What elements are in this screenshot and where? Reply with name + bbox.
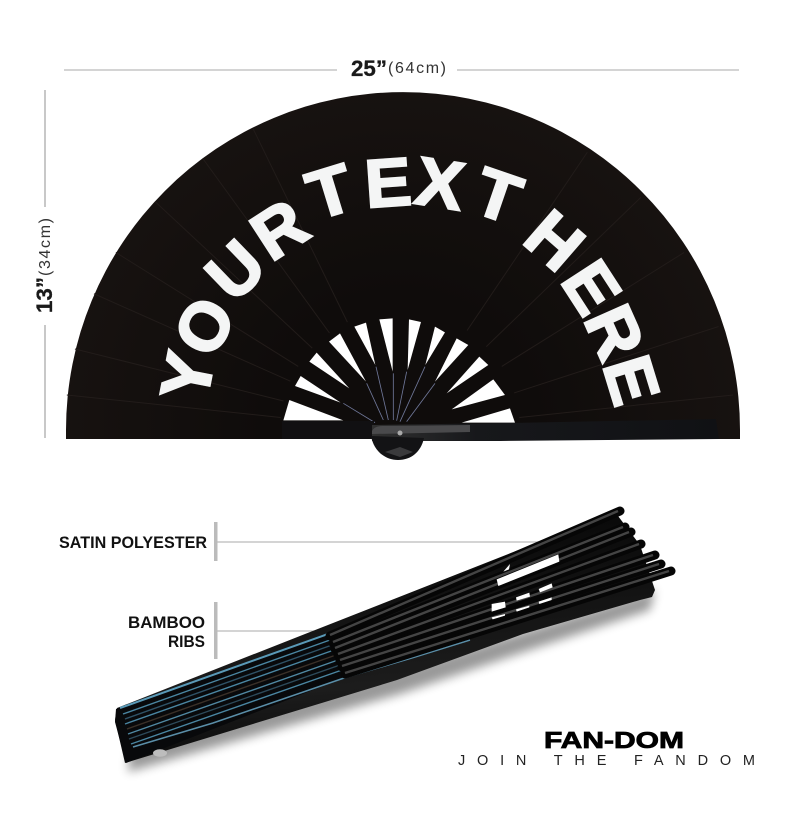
label: bamboo ribs: BAMBOO — [128, 613, 205, 632]
logo: FAN-DOM — [544, 727, 684, 753]
fabric folds — [67, 129, 733, 417]
label: satin polyester — [59, 522, 540, 561]
pin — [153, 749, 167, 757]
width dimension: (64cm) — [388, 60, 446, 77]
label: bamboo ribs — [128, 602, 330, 659]
curved fan text: O — [159, 285, 251, 368]
width dimension — [64, 56, 739, 81]
open fan — [66, 92, 740, 460]
curved fan text: H — [511, 195, 598, 286]
rod highlights — [330, 511, 669, 673]
rib openings — [283, 318, 515, 423]
height dimension: 13” — [32, 277, 57, 313]
curved fan text: Y — [146, 345, 229, 407]
curved fan text: U — [191, 226, 280, 315]
height dimension — [32, 90, 57, 438]
label: bamboo ribs: RIBS — [168, 632, 205, 651]
fan canopy — [66, 92, 740, 439]
curved fan text — [146, 142, 675, 413]
curved fan text: T — [298, 149, 362, 234]
curved fan text: E — [588, 347, 675, 413]
width dimension: 25” — [351, 56, 387, 81]
left guard stick — [282, 421, 374, 439]
curved fan text: E — [362, 143, 414, 222]
bamboo handle ribs — [115, 633, 470, 763]
label: satin polyester: SATIN POLYESTER — [59, 533, 207, 552]
folded fan — [115, 511, 671, 772]
white fabric gaps — [492, 554, 559, 619]
curved fan text: T — [465, 152, 531, 239]
logo — [458, 727, 755, 769]
curved fan text: R — [569, 294, 659, 371]
shadow — [128, 590, 655, 772]
black rods — [330, 511, 671, 674]
height dimension: (34cm) — [37, 218, 54, 276]
lower body — [115, 512, 655, 763]
curved fan text: X — [410, 142, 469, 225]
right guard stick — [372, 419, 719, 441]
hub rivet — [371, 425, 470, 460]
curved fan text: E — [547, 247, 636, 328]
curved fan text: R — [238, 184, 321, 275]
logo: JOIN THE FANDOM — [458, 753, 755, 769]
